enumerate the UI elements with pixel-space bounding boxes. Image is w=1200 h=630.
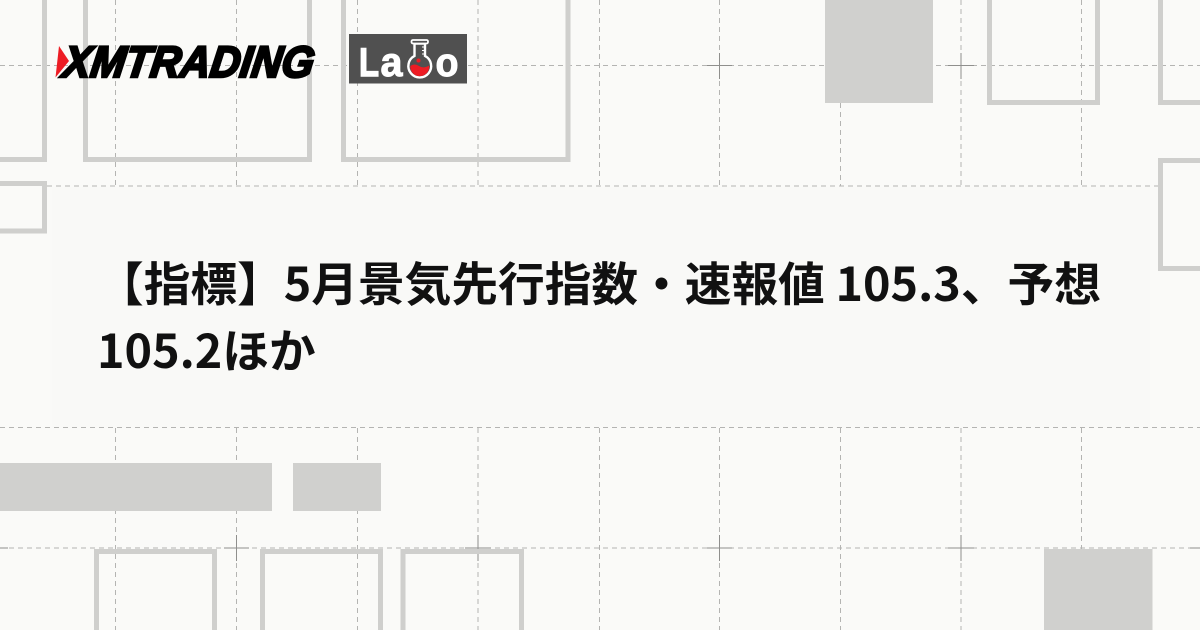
title (97, 248, 1101, 382)
logo: Labo: L (359, 41, 379, 85)
logos (56, 34, 467, 87)
logo: XMTRADING: XMTRADING (57, 38, 318, 87)
title: 【指標】5月景気先行指数・速報値 105.3、予想 (97, 248, 1101, 315)
title panel (52, 187, 1150, 427)
logo: Labo (349, 34, 467, 85)
logo: Labo: a (380, 39, 404, 85)
title: 105.2ほか (97, 315, 316, 382)
icon: flask (408, 40, 431, 77)
logo: Labo: o (436, 41, 458, 85)
